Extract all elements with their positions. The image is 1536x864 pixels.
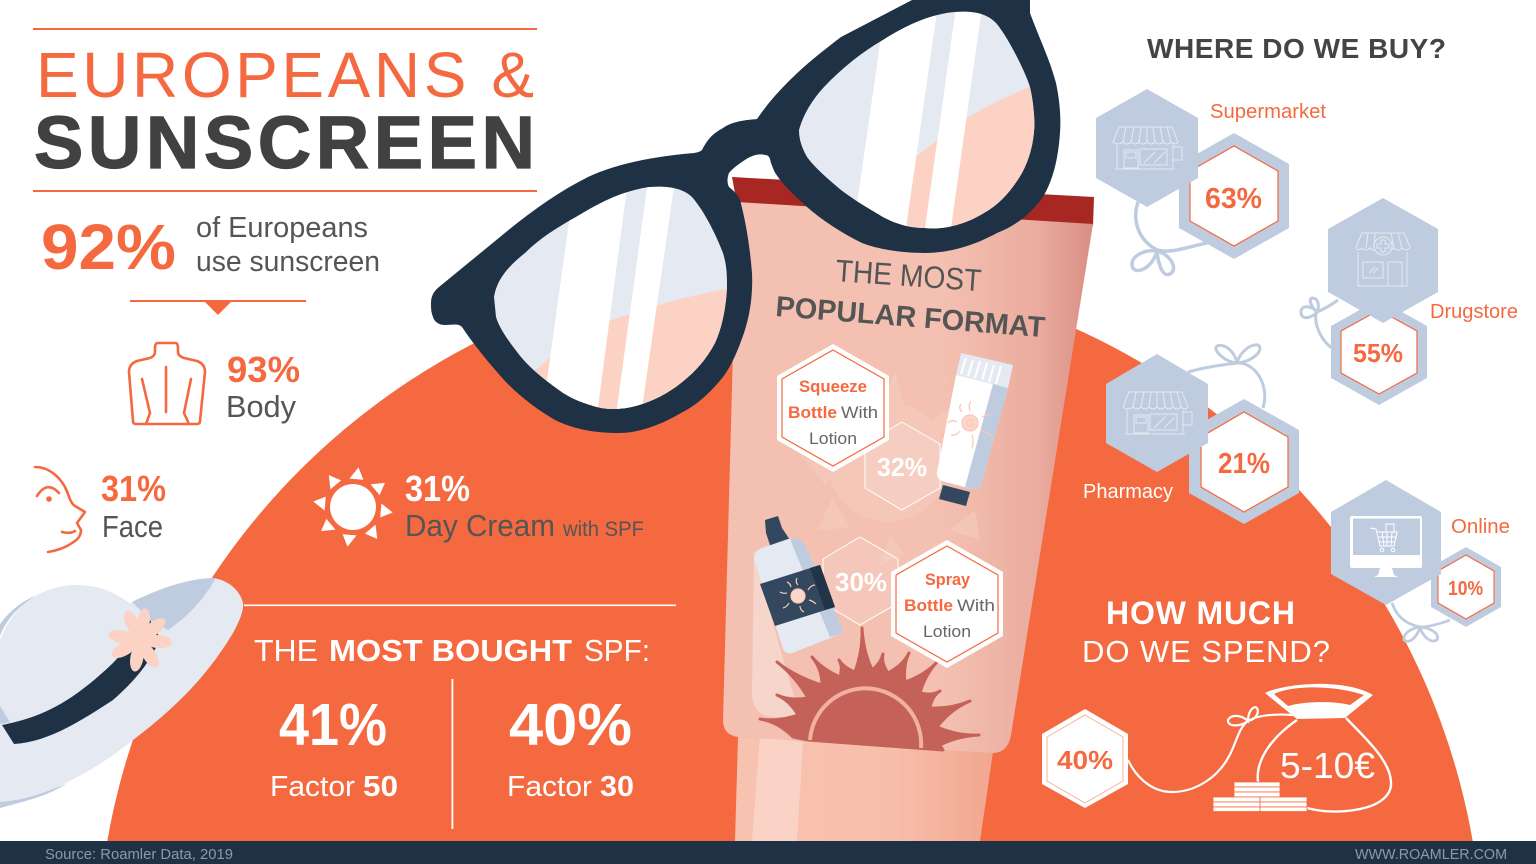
40% hexagon: 40%: [1057, 745, 1113, 775]
stat: 92% of Europeans: of Europeans: [196, 212, 368, 244]
title: SUNSCREEN: [34, 101, 535, 184]
icon: body: [129, 343, 205, 424]
sun at tube bottom: [760, 628, 979, 750]
squeeze bottle label: With: [841, 403, 878, 422]
32% hexagon: 32%: [877, 452, 927, 482]
stat: body 93%: [226, 349, 300, 424]
left lens: [494, 186, 727, 409]
divider with arrow: [130, 300, 306, 315]
title: EUROPEANS &: [36, 39, 534, 111]
spray bottle label: [891, 540, 1003, 668]
63% hexagon: 63%: [1205, 183, 1262, 215]
icon: sun hat: [0, 578, 243, 808]
hat flower: [107, 607, 172, 673]
heading: how much do we spend: HOW MUCH: [1106, 595, 1295, 631]
monitor hexagon: [1331, 480, 1441, 605]
footer bar: [0, 841, 1536, 864]
squeeze tube icon: [937, 353, 1013, 506]
panel: most bought SPF: [244, 604, 676, 829]
stat: day cream 31%: with SPF: [562, 518, 644, 541]
factor 50: 41%: [279, 692, 387, 758]
63% hexagon: [1179, 133, 1289, 259]
55% hexagon: 55%: [1353, 338, 1403, 368]
30% hexagon: [823, 537, 898, 625]
tube body: [723, 202, 1093, 753]
stat: day cream 31%: Day Cream: [405, 508, 555, 543]
icon: sun: [313, 467, 393, 547]
icon: sunglasses: [431, 0, 1060, 433]
spray bottle label: Lotion: [923, 622, 971, 641]
money bag: 5-10€: [1280, 745, 1375, 786]
arm: [735, 737, 993, 841]
factor 30: Factor: [507, 771, 592, 803]
footer bar: WWW.ROAMLER.COM: [1355, 846, 1507, 863]
factor 30: 40%: [509, 692, 632, 758]
ribbon: [1392, 603, 1450, 641]
stat: day cream 31%: [405, 468, 644, 543]
tube heading: THE MOST: [835, 253, 983, 298]
spray bottle label: Spray: [925, 570, 971, 589]
stat: body 93%: Body: [226, 389, 296, 424]
10% hexagon: 10%: [1448, 578, 1483, 600]
stat: 92% of Europeans: [41, 211, 380, 283]
rope: [1128, 707, 1293, 792]
label: Pharmacy: [1083, 480, 1174, 503]
factor 50: 50: [363, 771, 398, 803]
ribbon: [1301, 298, 1338, 348]
factor 30: 30: [600, 771, 634, 803]
ribbon: [1132, 202, 1207, 275]
title: [33, 28, 537, 192]
stat: 92% of Europeans: use sunscreen: [196, 246, 380, 278]
panel: online: [1331, 480, 1510, 641]
heading: [254, 633, 650, 668]
money bag: [1258, 684, 1391, 812]
spray bottle label: With: [957, 596, 995, 615]
stat: face 31%: 31%: [101, 468, 166, 509]
label: Drugstore: [1430, 300, 1518, 323]
panel: supermarket: [1096, 89, 1326, 275]
tube crimp: [732, 177, 1094, 226]
heading: how much do we spend: [1082, 595, 1330, 669]
panel: drugstore: [1301, 198, 1518, 405]
store hexagon: [1106, 354, 1208, 472]
panel: sunscreen tube: [723, 177, 1094, 753]
factor 30: [507, 692, 634, 803]
drugstore hexagon: [1328, 198, 1438, 323]
55% hexagon: [1331, 299, 1427, 405]
coins: [1213, 782, 1307, 812]
panel: pharmacy: [1083, 345, 1299, 524]
orange semicircle background: [107, 267, 1473, 841]
heading: MOST BOUGHT: [329, 633, 572, 668]
tube heading: POPULAR FORMAT: [774, 291, 1046, 344]
stat: face 31%: [101, 468, 166, 544]
squeeze bottle label: Squeeze: [799, 377, 867, 396]
ribbon: [1188, 345, 1265, 408]
21% hexagon: 21%: [1218, 448, 1270, 480]
heading: SPF:: [584, 633, 650, 668]
10% hexagon: [1431, 547, 1501, 627]
stat: day cream 31%: 31%: [405, 468, 470, 509]
32% hexagon: [865, 422, 940, 510]
spray bottle label: Bottle: [904, 596, 953, 615]
icon: face: [35, 467, 85, 552]
label: Online: [1451, 515, 1510, 538]
stat: body 93%: 93%: [227, 349, 300, 390]
squeeze bottle label: Lotion: [809, 429, 857, 448]
right lens: [799, 12, 1034, 228]
label: Supermarket: [1210, 100, 1326, 123]
store hexagon: [1096, 89, 1198, 207]
squeeze bottle label: Bottle: [788, 403, 837, 422]
spray bottle icon: [754, 516, 842, 654]
stat: face 31%: Face: [102, 509, 163, 544]
tube heading: [774, 253, 1046, 344]
heading: where do we buy: WHERE DO WE BUY?: [1147, 33, 1446, 64]
21% hexagon: [1189, 399, 1299, 524]
footer bar: Source: Roamler Data, 2019: [45, 846, 233, 863]
heading: THE: [254, 633, 318, 668]
tube highlight: [752, 552, 800, 717]
factor 50: Factor: [270, 771, 355, 803]
30% hexagon: 30%: [835, 567, 887, 597]
heading: how much do we spend: DO WE SPEND?: [1082, 634, 1330, 669]
squeeze bottle label: [777, 344, 889, 472]
faint sun behind text: [800, 372, 980, 565]
panel: spending: [1042, 684, 1391, 812]
factor 50: [270, 692, 398, 803]
40% hexagon: [1042, 709, 1128, 808]
stat: 92% of Europeans: 92%: [41, 211, 176, 283]
